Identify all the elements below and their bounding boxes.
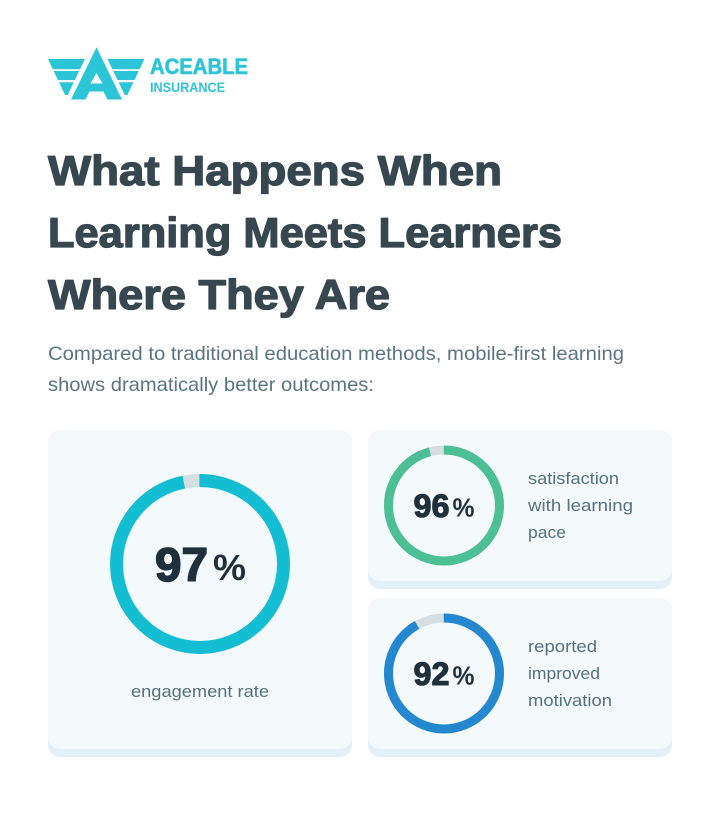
panel: engagement rate: % [213, 547, 246, 588]
panel: satisfaction [368, 430, 672, 589]
title: Learning Meets Learners [48, 209, 562, 256]
label: satisfaction with learning pace: with learning [527, 496, 633, 515]
label: reported improved motivation: reported [528, 637, 597, 656]
title: Where They Are [48, 271, 390, 318]
logo: Aceable Insurance [48, 47, 248, 100]
value: 97%: 97 [155, 538, 208, 591]
label: reported improved motivation [528, 637, 612, 710]
title: What Happens When [48, 147, 502, 194]
logo subtitle: INSURANCE [150, 80, 225, 95]
panel: motivation: % [452, 660, 474, 690]
icon: winged A [48, 47, 144, 100]
panel: satisfaction: % [452, 492, 474, 522]
donut chart: 96% [388, 450, 500, 561]
subtitle: Compared to traditional education methods, mobile-first learning [48, 343, 624, 365]
label: reported improved motivation: motivation [528, 691, 612, 710]
title [48, 147, 562, 318]
value: 92%: 92 [414, 656, 450, 692]
label: satisfaction with learning pace [527, 469, 633, 542]
subtitle [48, 343, 624, 396]
panel: engagement rate [48, 430, 352, 757]
label: satisfaction with learning pace: pace [528, 523, 566, 542]
label: engagement rate: engagement rate [131, 682, 269, 701]
donut chart: 97% [116, 480, 284, 648]
logo wordmark: ACEABLE [150, 54, 248, 79]
subtitle: shows dramatically better outcomes: [48, 374, 374, 396]
label: reported improved motivation: improved [528, 664, 600, 683]
value: 96%: 96 [414, 488, 450, 524]
label: satisfaction with learning pace: satisfaction [528, 469, 619, 488]
panel: motivation [368, 598, 672, 757]
donut chart: 92% [388, 618, 500, 729]
